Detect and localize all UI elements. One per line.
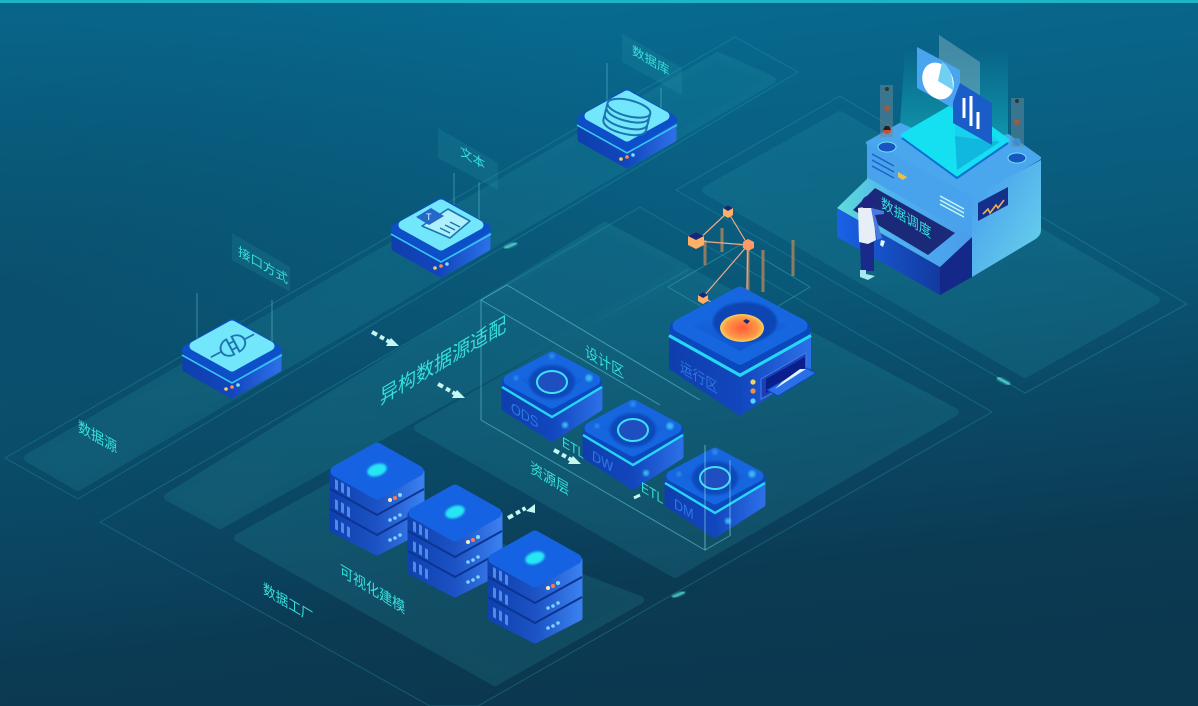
console side bbox=[940, 237, 972, 295]
server stack 3 bbox=[488, 536, 582, 641]
icon: plug bbox=[207, 327, 258, 365]
status lights bbox=[750, 379, 756, 404]
panel: run-zone outline bbox=[668, 245, 810, 329]
label: visual modeling: 可视化建模 bbox=[340, 562, 405, 618]
arrow: ETL 1 bbox=[554, 433, 584, 464]
cube: DM: DM bbox=[674, 496, 694, 524]
label: heterogeneous data source adaptation: 异构数据源适配 bbox=[380, 312, 506, 410]
cube: ODS: ODS bbox=[511, 400, 539, 432]
hologram tray bbox=[902, 103, 1008, 178]
panel: data factory platform bbox=[100, 207, 992, 706]
chart panel: bars bbox=[953, 83, 992, 145]
label: run zone: 运行区 bbox=[680, 358, 718, 398]
source node: text bbox=[391, 128, 498, 274]
chart panel: pie bbox=[916, 47, 960, 112]
arrow: glow dash 1 bbox=[505, 243, 516, 248]
arrow: glow dash 3 bbox=[998, 378, 1009, 384]
panel: data source band bbox=[5, 37, 798, 499]
cube: DW bbox=[583, 401, 683, 486]
arrow: source flow 2 bbox=[438, 384, 465, 398]
source node: database bbox=[577, 33, 682, 165]
glass box: design zone back bbox=[481, 285, 731, 550]
icon: database bbox=[601, 95, 652, 139]
scheduling machine bbox=[837, 35, 1041, 295]
icon: document bbox=[416, 208, 470, 238]
arrow: source flow 1 bbox=[372, 332, 399, 346]
card slot bbox=[761, 353, 816, 399]
cube: DM bbox=[665, 449, 765, 534]
source node: interface bbox=[182, 233, 290, 395]
icon: document: T bbox=[426, 212, 432, 222]
cube: ODS bbox=[502, 353, 602, 438]
arrow: glow dash 2 bbox=[673, 592, 684, 597]
icon: network nodes bbox=[688, 205, 754, 304]
label: data factory: 数据工厂 bbox=[263, 580, 313, 627]
orange disc bbox=[720, 314, 764, 342]
label: data scheduling: 数据调度 bbox=[881, 194, 931, 242]
indicator column left bbox=[878, 85, 896, 152]
label: data source: 数据源 bbox=[78, 418, 117, 457]
icon: line chart bbox=[978, 187, 1008, 221]
machine right face bbox=[972, 160, 1041, 277]
source node: database: 数据库 bbox=[632, 43, 669, 79]
beam bbox=[900, 50, 1008, 177]
arrow: factory flow bbox=[508, 504, 535, 518]
cube: DW: DW bbox=[592, 448, 613, 477]
label: resource layer: 资源层 bbox=[530, 459, 569, 499]
server stack 2 bbox=[408, 490, 502, 595]
server stack 1 bbox=[330, 448, 424, 553]
console front bbox=[837, 208, 940, 295]
source node: text: 文本 bbox=[460, 144, 485, 173]
label: design zone: 设计区 bbox=[585, 343, 624, 382]
console screen bbox=[853, 188, 955, 255]
chart panel back bbox=[939, 35, 980, 100]
source node: interface: 接口方式 bbox=[238, 243, 288, 287]
machine left face bbox=[868, 143, 972, 240]
console top bbox=[837, 178, 972, 267]
control lines bbox=[872, 154, 907, 180]
top accent bar bbox=[0, 0, 1198, 3]
glass box: design zone front bbox=[705, 445, 730, 550]
arrow: ETL 1: ETL bbox=[562, 433, 584, 462]
panel: scheduling platform bbox=[676, 96, 1187, 393]
machine top face bbox=[868, 125, 1039, 197]
arrow: ETL 2: ETL bbox=[641, 478, 663, 507]
run zone cube bbox=[669, 292, 816, 411]
indicator column right bbox=[1008, 98, 1026, 163]
status text strip bbox=[940, 196, 964, 217]
run zone network bbox=[688, 205, 793, 322]
person bbox=[858, 196, 885, 280]
